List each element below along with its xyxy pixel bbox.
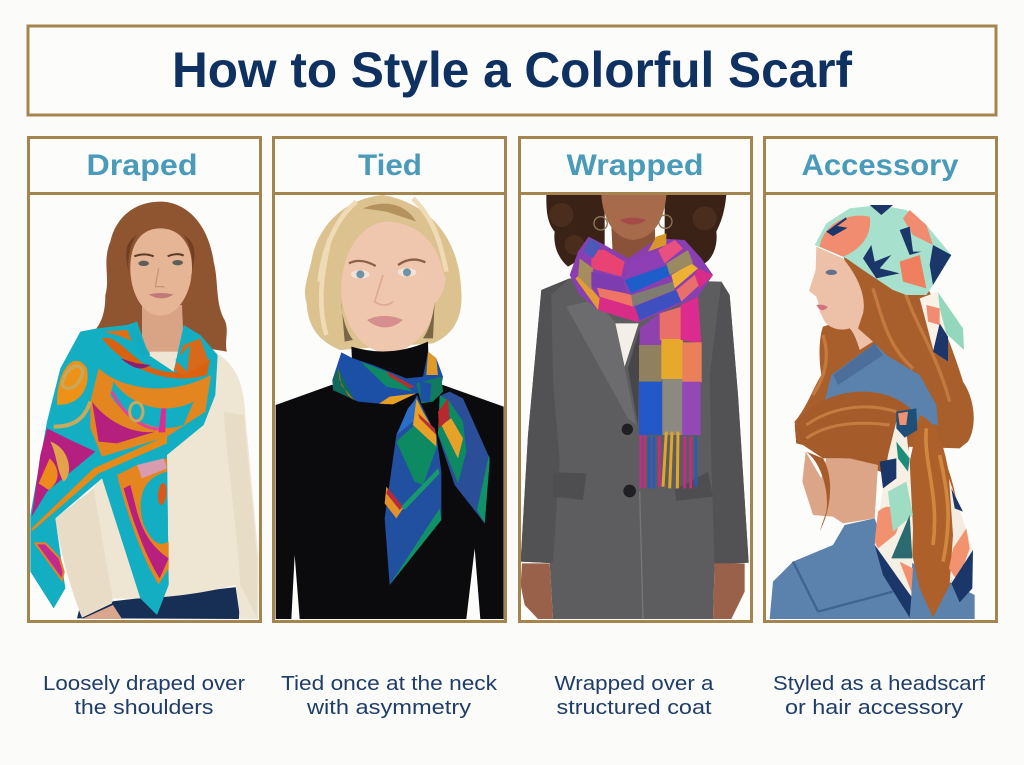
illustration: headscarf and ponytail [770, 205, 975, 619]
caption: wrapped [554, 673, 714, 719]
heading: accessory: Accessory [802, 149, 959, 182]
caption: wrapped: Wrapped over a [554, 673, 714, 695]
heading: wrapped: Wrapped [566, 149, 704, 182]
panel: draped [28, 138, 260, 622]
caption: accessory [773, 673, 985, 719]
caption: tied: Tied once at the neck [281, 673, 498, 695]
caption: tied [281, 673, 498, 719]
panel: tied [274, 138, 506, 622]
caption: draped: the shoulders [74, 697, 214, 719]
illustration: woman with tied scarf [276, 195, 504, 619]
caption: tied: with asymmetry [306, 697, 471, 719]
heading: draped: Draped [86, 149, 198, 182]
caption: accessory: or hair accessory [785, 697, 963, 719]
caption: draped: Loosely draped over [43, 673, 245, 695]
illustration: woman with draped scarf [30, 202, 259, 619]
caption: accessory: Styled as a headscarf [773, 673, 985, 695]
panel: wrapped [520, 138, 752, 622]
title [28, 26, 996, 115]
caption: draped [43, 673, 245, 719]
caption: wrapped: structured coat [556, 697, 712, 719]
heading: tied: Tied [358, 149, 422, 182]
title: How to Style a Colorful Scarf [172, 42, 852, 98]
illustration: woman in coat and scarf [521, 195, 749, 619]
panel: accessory [764, 138, 996, 622]
